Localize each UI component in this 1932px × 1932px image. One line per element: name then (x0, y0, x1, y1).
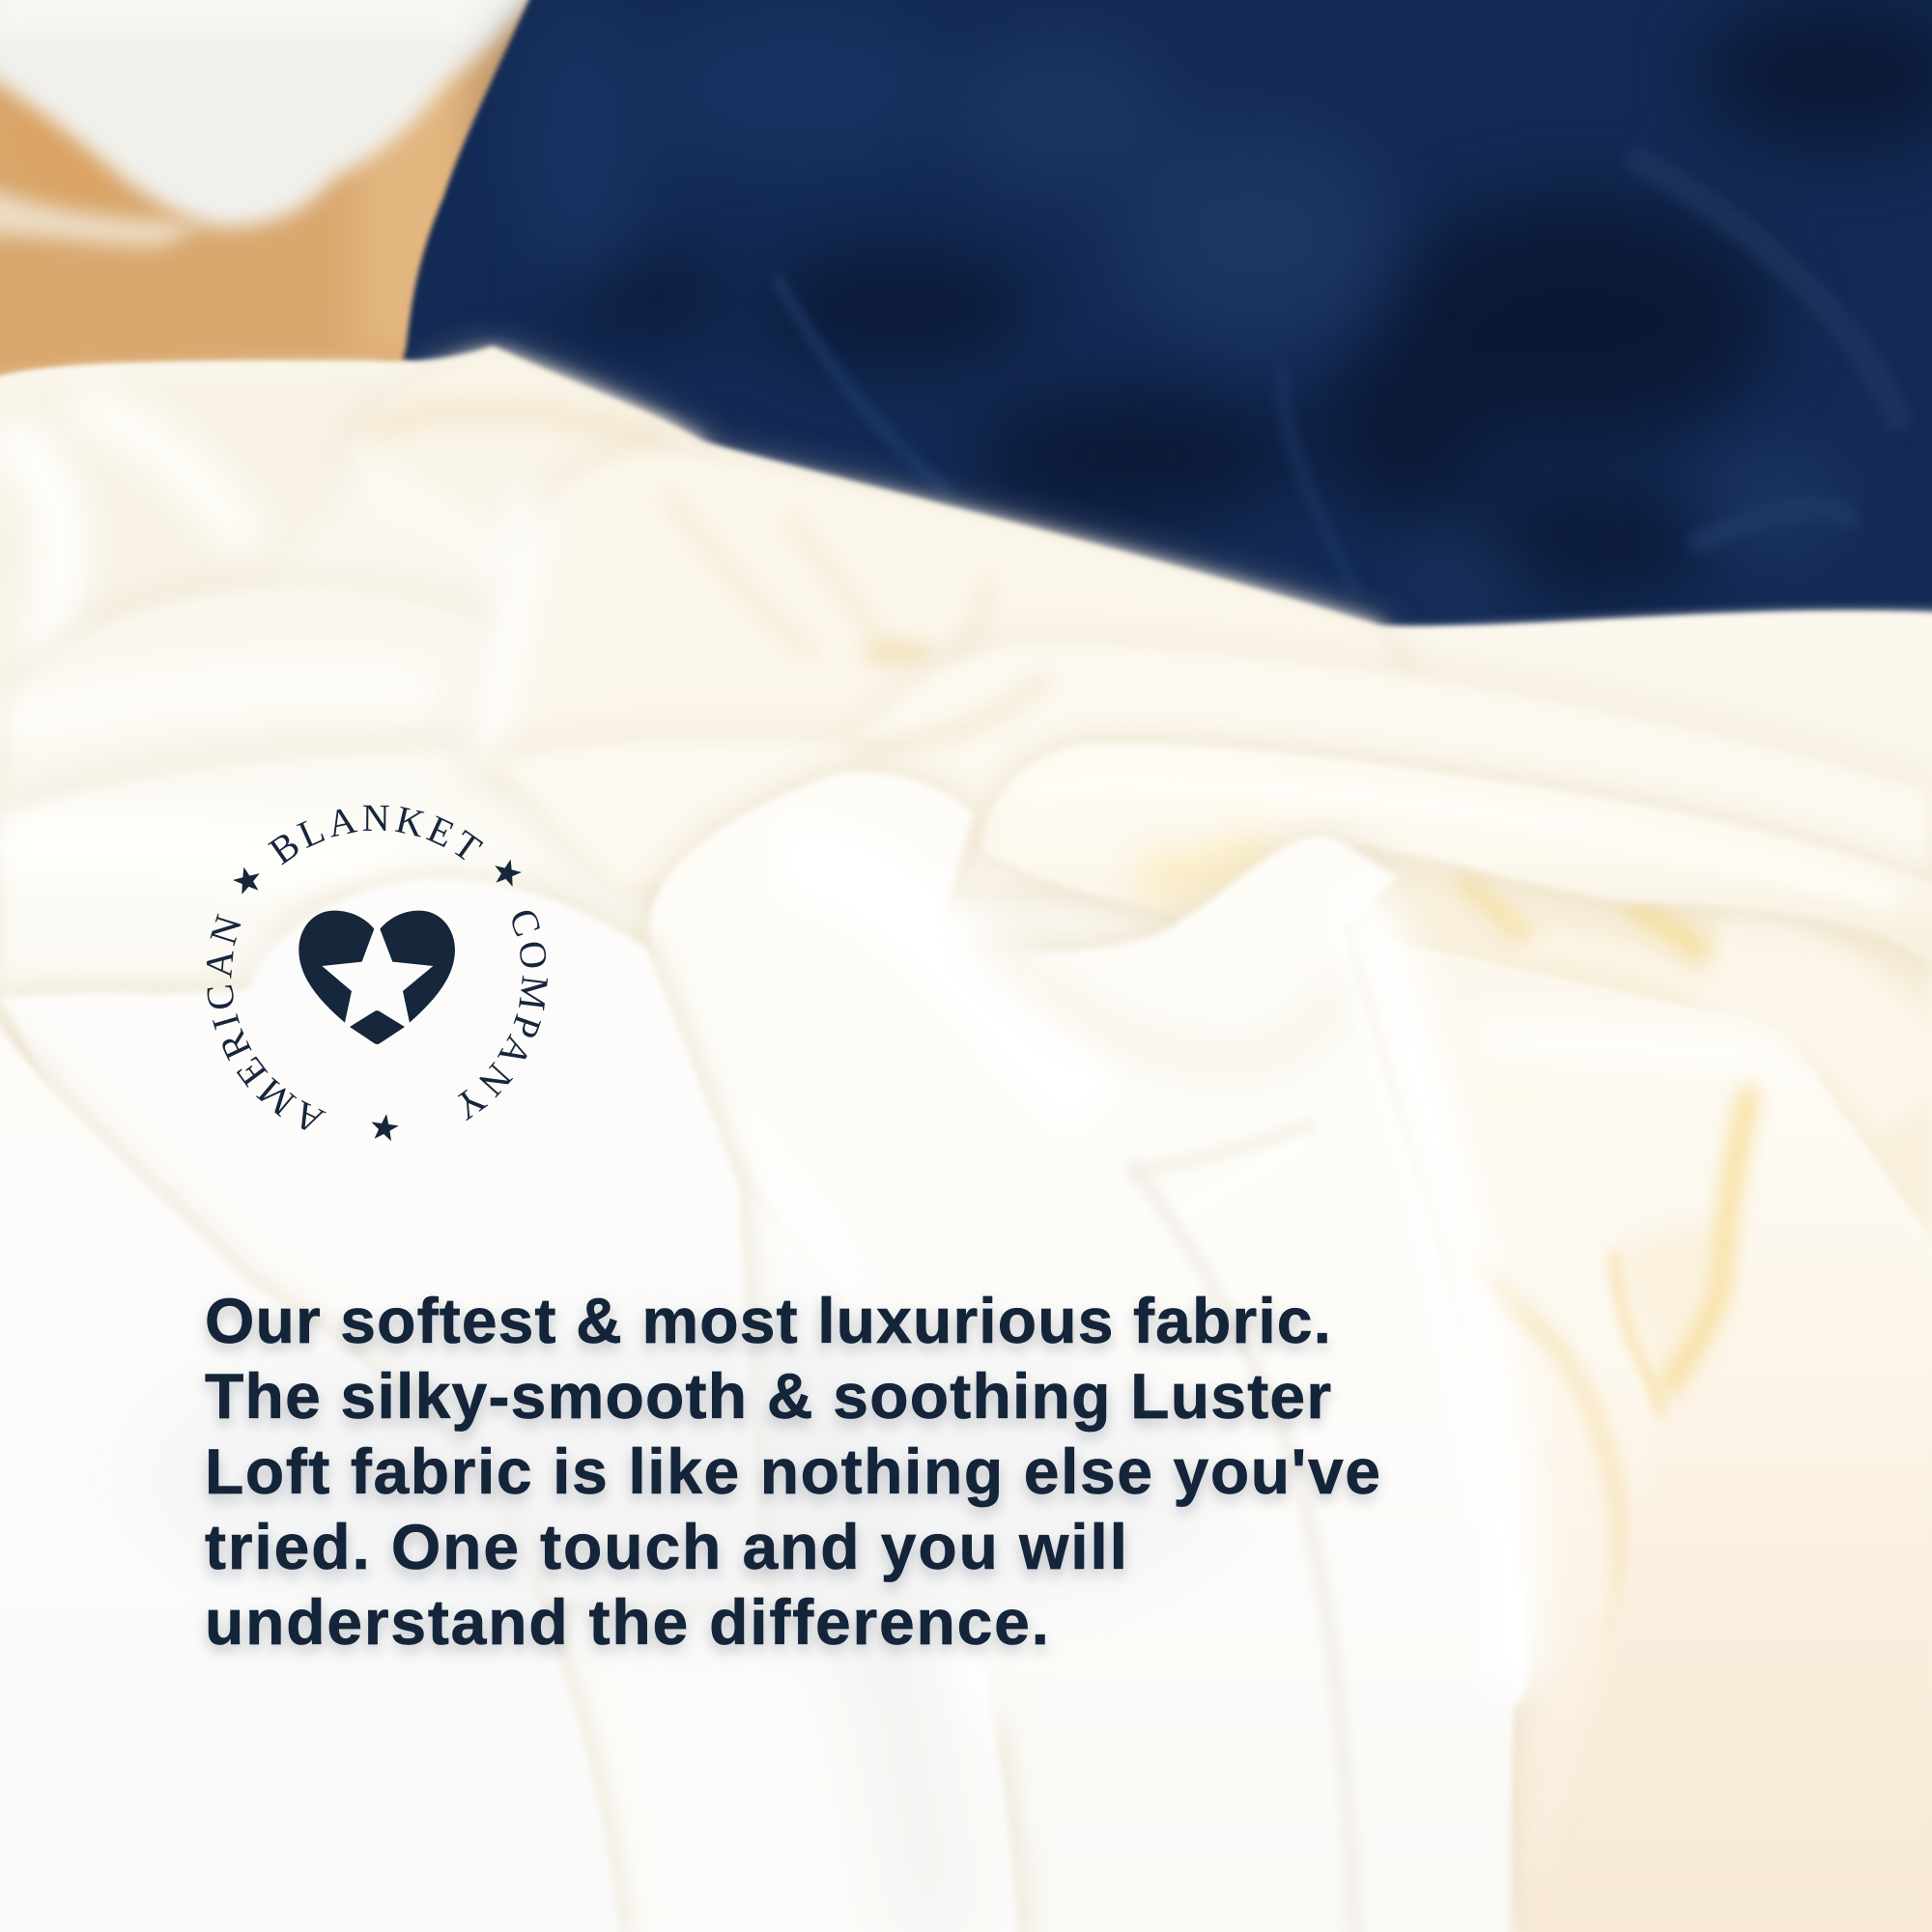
logo star: bottom (369, 1112, 400, 1142)
fold: top left (0, 366, 382, 690)
logo star: left (230, 864, 264, 895)
copy line 2: The silky-smooth & soothing Luster (205, 1360, 1331, 1432)
logo heart with star cut-out (298, 911, 455, 1044)
copy line 4: tried. One touch and you will (205, 1511, 1127, 1582)
fold: right panel (1345, 929, 1932, 1932)
white bowl (0, 0, 542, 246)
basket (0, 0, 567, 407)
fold: centre lateral (493, 640, 1932, 912)
fold: tall central fold (648, 772, 1528, 1932)
copy line 1: Our softest & most luxurious fabric. (205, 1285, 1331, 1356)
fold: centre back (469, 451, 1430, 788)
logo text: BLANKET: BLANKET (268, 806, 483, 866)
fold: small upper ridge (345, 350, 702, 591)
navy pillow (403, 0, 1932, 653)
copy line 3: Loft fabric is like nothing else you've (205, 1435, 1380, 1507)
fold: front left (0, 1012, 622, 1932)
grey wash behind copy (148, 1319, 1233, 1638)
fold: upper right band (1355, 612, 1932, 863)
fold: logo area ridge (0, 877, 764, 1602)
logo star: right (491, 856, 525, 888)
fold: wide top band (980, 743, 1932, 974)
logo text: COMPANY: COMPANY (458, 910, 549, 1121)
fold: lower right panel (1528, 1047, 1932, 1932)
copy line 5: understand the difference. (205, 1586, 1049, 1658)
fold: upper left layers (0, 584, 653, 998)
fold: front centre (246, 1029, 1019, 1932)
logo text: AMERICAN: AMERICAN (207, 914, 327, 1130)
fold: mid-right lobes with yellow shadow (1331, 850, 1932, 1257)
